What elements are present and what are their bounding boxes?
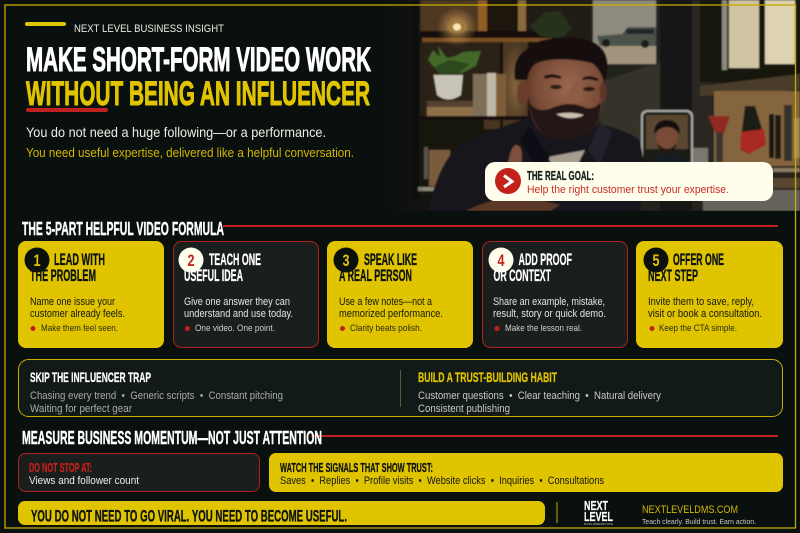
card 4: add proof or context: ADD PROOF xyxy=(518,251,572,269)
build a trust-building habit: Consistent publishing xyxy=(418,403,510,415)
build a trust-building habit: BUILD A TRUST-BUILDING HABIT xyxy=(418,369,557,385)
pegboard with tools xyxy=(692,91,800,211)
card 3: speak like a real person xyxy=(327,241,473,348)
card 2: teach one useful idea: TEACH ONE xyxy=(209,251,261,269)
panel: signals that show trust: WATCH THE SIGNALS THAT SHOW TRUST: xyxy=(280,461,433,475)
card 5: offer one next step: visit or book a consultation. xyxy=(648,308,762,320)
potted plant xyxy=(428,46,481,100)
logo: next level: LEVEL xyxy=(584,509,613,524)
card 1: lead with the problem: customer already feels. xyxy=(30,308,125,320)
panel: signals that show trust: Saves • Replies • Profile visits • Website clicks • Inquiries • Consultations xyxy=(280,475,604,487)
skip the influencer trap: Chasing every trend • Generic scripts • Constant pitching xyxy=(30,390,283,402)
panel: signals that show trust xyxy=(269,453,783,492)
callout label: THE REAL GOAL: xyxy=(527,168,594,183)
subhead yellow: You need useful expertise, delivered like a helpful conversation. xyxy=(26,145,354,160)
panel: do not stop at xyxy=(18,454,260,492)
panel: do not stop at: Views and follower count xyxy=(29,475,139,487)
card 5: offer one next step: OFFER ONE xyxy=(673,251,724,269)
eyebrow text: NEXT LEVEL BUSINESS INSIGHT xyxy=(74,23,224,35)
logo: next level xyxy=(584,498,613,526)
shelves xyxy=(413,0,591,200)
phone on tripod showing presenter xyxy=(640,108,694,162)
books xyxy=(473,73,506,116)
card 1: lead with the problem: Name one issue your xyxy=(30,296,115,308)
photo left fade xyxy=(380,0,425,211)
closing banner xyxy=(18,501,545,526)
skip the influencer trap xyxy=(30,369,283,415)
eyebrow accent bar xyxy=(25,22,66,26)
card 4: add proof or context: OR CONTEXT xyxy=(494,267,551,285)
plant top xyxy=(530,11,572,38)
card 2: teach one useful idea: understand and use today. xyxy=(184,308,293,320)
card 5: offer one next step: Keep the CTA simple. xyxy=(659,323,737,334)
card 3: speak like a real person: A REAL PERSON xyxy=(339,267,412,285)
subhead: You do not need a huge following—or a performance. xyxy=(26,124,326,140)
card 5: offer one next step: Invite them to save, reply, xyxy=(648,296,754,308)
card 4: add proof or context: 4 xyxy=(498,251,505,270)
icon: red chevron circle xyxy=(495,168,521,194)
card 1: lead with the problem: THE PROBLEM xyxy=(30,267,96,285)
skip the influencer trap: SKIP THE INFLUENCER TRAP xyxy=(30,369,151,385)
card 2: teach one useful idea: Give one answer they can xyxy=(184,296,290,308)
logo: next level: NEXT xyxy=(584,498,608,513)
card 4: add proof or context: Make the lesson real. xyxy=(505,323,582,334)
card 1: lead with the problem xyxy=(18,241,164,348)
closing banner: YOU DO NOT NEED TO GO VIRAL. YOU NEED TO BECOME USEFUL. xyxy=(31,508,347,526)
back wall xyxy=(590,0,720,211)
framed car picture xyxy=(591,0,658,66)
card 3: speak like a real person: SPEAK LIKE xyxy=(364,251,417,269)
callout text: Help the right customer trust your expertise. xyxy=(527,184,729,196)
window xyxy=(700,0,800,96)
lamp xyxy=(437,7,477,47)
card 4: add proof or context: result, story or quick demo. xyxy=(493,308,606,320)
card 4: add proof or context: Share an example, mistake, xyxy=(493,296,605,308)
card 3: speak like a real person: memorized performance. xyxy=(339,308,443,320)
hero header xyxy=(25,22,371,160)
card 1: lead with the problem: Make them feel seen. xyxy=(41,323,118,334)
build a trust-building habit: Customer questions • Clear teaching • Natural delivery xyxy=(418,390,661,402)
card 3: speak like a real person: 3 xyxy=(342,251,350,270)
photo: presenter filming himself in a workshop office xyxy=(380,0,800,211)
callout: the real goal xyxy=(485,162,773,201)
card 3: speak like a real person: Use a few notes—not a xyxy=(339,296,433,308)
card 1: lead with the problem: 1 xyxy=(34,251,40,270)
build a trust-building habit xyxy=(418,369,661,415)
presenter xyxy=(428,37,645,211)
section heading: formula: THE 5-PART HELPFUL VIDEO FORMULA xyxy=(22,219,224,239)
footer site and tagline: Teach clearly. Build trust. Earn action. xyxy=(642,517,756,526)
title line 2: WITHOUT BEING AN INFLUENCER xyxy=(26,75,370,113)
panel: do not stop at: DO NOT STOP AT: xyxy=(29,461,92,475)
card 2: teach one useful idea: 2 xyxy=(188,251,194,270)
card 5: offer one next step xyxy=(636,241,783,348)
section heading: measure momentum: MEASURE BUSINESS MOMENTUM—NOT JUST ATTENTION xyxy=(22,428,322,448)
card 2: teach one useful idea: One video. One point. xyxy=(195,323,275,334)
footer divider xyxy=(556,502,558,523)
card 2: teach one useful idea: USEFUL IDEA xyxy=(184,267,243,285)
card 3: speak like a real person: Clarity beats polish. xyxy=(350,323,422,334)
logo: next level: DIGITAL MARKETING SUITE xyxy=(584,523,613,526)
footer site and tagline xyxy=(642,504,756,526)
title underline xyxy=(26,108,108,112)
card 5: offer one next step: NEXT STEP xyxy=(648,267,698,285)
title line 1: MAKE SHORT-FORM VIDEO WORK xyxy=(26,41,371,79)
footer site and tagline: NEXTLEVELDMS.COM xyxy=(642,504,738,516)
panel: trap vs habit xyxy=(18,360,782,416)
card 2: teach one useful idea xyxy=(174,242,318,348)
card 1: lead with the problem: LEAD WITH xyxy=(54,251,105,269)
skip the influencer trap: Waiting for perfect gear xyxy=(30,403,132,415)
card 5: offer one next step: 5 xyxy=(652,251,660,270)
card 4: add proof or context xyxy=(482,242,628,348)
